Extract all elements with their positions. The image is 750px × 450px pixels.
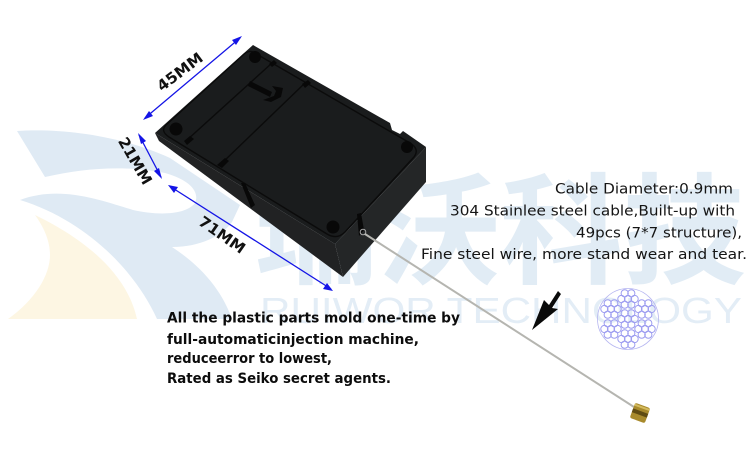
product: black plastic box	[155, 45, 426, 277]
dimension arrow: 45MM	[143, 36, 242, 120]
steel cable	[365, 234, 634, 407]
icon: cable cross-section	[598, 288, 658, 350]
top face	[155, 45, 426, 244]
text block: cable specification: 304 Stainlee steel cable,Built-up with	[450, 204, 735, 220]
watermark: company logo swoosh	[8, 130, 240, 319]
text block: plastic parts description: reduceerror to lowest,	[167, 351, 332, 367]
text block: cable specification: Cable Diameter:0.9mm	[555, 182, 733, 198]
slots and hook mark	[184, 60, 364, 236]
text block: cable specification: Fine steel wire, more stand wear and tear.	[421, 247, 747, 263]
text block: cable specification: 49pcs (7*7 structure),	[576, 226, 742, 242]
text block: plastic parts description: All the plastic parts mold one-time by	[167, 310, 461, 326]
dimension arrow: 71MM	[168, 185, 333, 291]
corner screw holes	[170, 51, 413, 234]
text block: plastic parts description: full-automaticinjection machine,	[167, 332, 419, 348]
dimension label: 45MM: 45MM	[153, 49, 207, 95]
lid outline and grooves	[164, 51, 416, 237]
right side face	[335, 147, 426, 277]
watermark: company name in Chinese: 瑞沃科技	[254, 166, 746, 300]
dimension label: 71MM: 71MM	[195, 212, 249, 258]
text block: plastic parts description: Rated as Seiko secret agents.	[167, 371, 391, 387]
watermark: company name in English: RUIWOR TECHNOLOGY	[260, 290, 742, 331]
dimension arrow: 21MM	[138, 133, 162, 179]
text block: cable specification	[421, 182, 747, 263]
cable exit eyelet	[360, 229, 366, 235]
arrow: pointing at cable	[532, 291, 561, 330]
left side face	[155, 133, 343, 277]
brass cable end	[630, 403, 650, 423]
text block: plastic parts description	[167, 310, 461, 387]
dimension label: 21MM: 21MM	[114, 134, 156, 188]
